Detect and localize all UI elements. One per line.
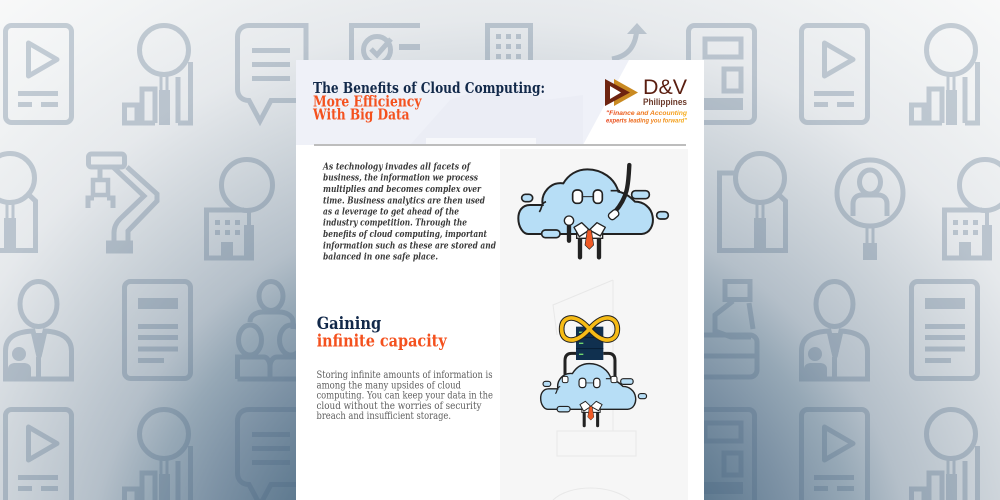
intro paragraph: industry competition. Through the — [323, 218, 467, 229]
header divider — [314, 144, 686, 146]
page sheet — [296, 60, 704, 500]
icon: cloud with infinity server — [541, 318, 647, 426]
icon: logo arrows — [605, 79, 638, 106]
panel: illustration column — [500, 149, 688, 500]
intro paragraph: multiplies and becomes complex over — [323, 184, 482, 195]
logo: Philippines — [643, 97, 687, 107]
section text: among the many upsides of cloud — [316, 379, 461, 391]
intro paragraph: information such as these are stored and — [323, 240, 496, 251]
server rack — [576, 327, 603, 360]
intro paragraph: As technology invades all facets of — [322, 161, 471, 172]
intro paragraph: balanced in one safe place. — [323, 251, 438, 262]
arms — [565, 353, 615, 377]
section text: cloud without the worries of security — [316, 400, 482, 412]
title — [312, 80, 545, 123]
logo: experts leading you forward" — [606, 118, 687, 124]
logo: D&V — [643, 76, 687, 99]
header banner — [296, 60, 629, 145]
intro paragraph: business, the information we process — [323, 173, 478, 184]
section heading: infinite capacity — [317, 332, 448, 352]
section text — [316, 369, 493, 422]
intro paragraph: as a leverage to get ahead of the — [323, 207, 459, 218]
section heading — [317, 314, 448, 352]
icon: cloud with microphone — [518, 165, 668, 257]
title: More Efficiency — [313, 94, 422, 111]
intro paragraph — [322, 161, 496, 262]
title: With Big Data — [312, 106, 410, 123]
logo — [605, 76, 687, 124]
section heading: Gaining — [317, 314, 381, 334]
intro paragraph: benefits of cloud computing, important — [323, 229, 487, 240]
intro paragraph: time. Business analytics are then used — [323, 195, 485, 206]
hands — [562, 376, 617, 383]
infinity symbol — [562, 318, 617, 340]
section text: Storing infinite amounts of information is — [316, 369, 492, 381]
ghost numeral 1 — [553, 280, 636, 500]
section text: computing. You can keep your data in the — [316, 390, 493, 402]
title: The Benefits of Cloud Computing: — [313, 80, 545, 97]
logo: "Finance and Accounting — [606, 110, 687, 117]
section text: breach and insufficient storage. — [316, 410, 451, 422]
